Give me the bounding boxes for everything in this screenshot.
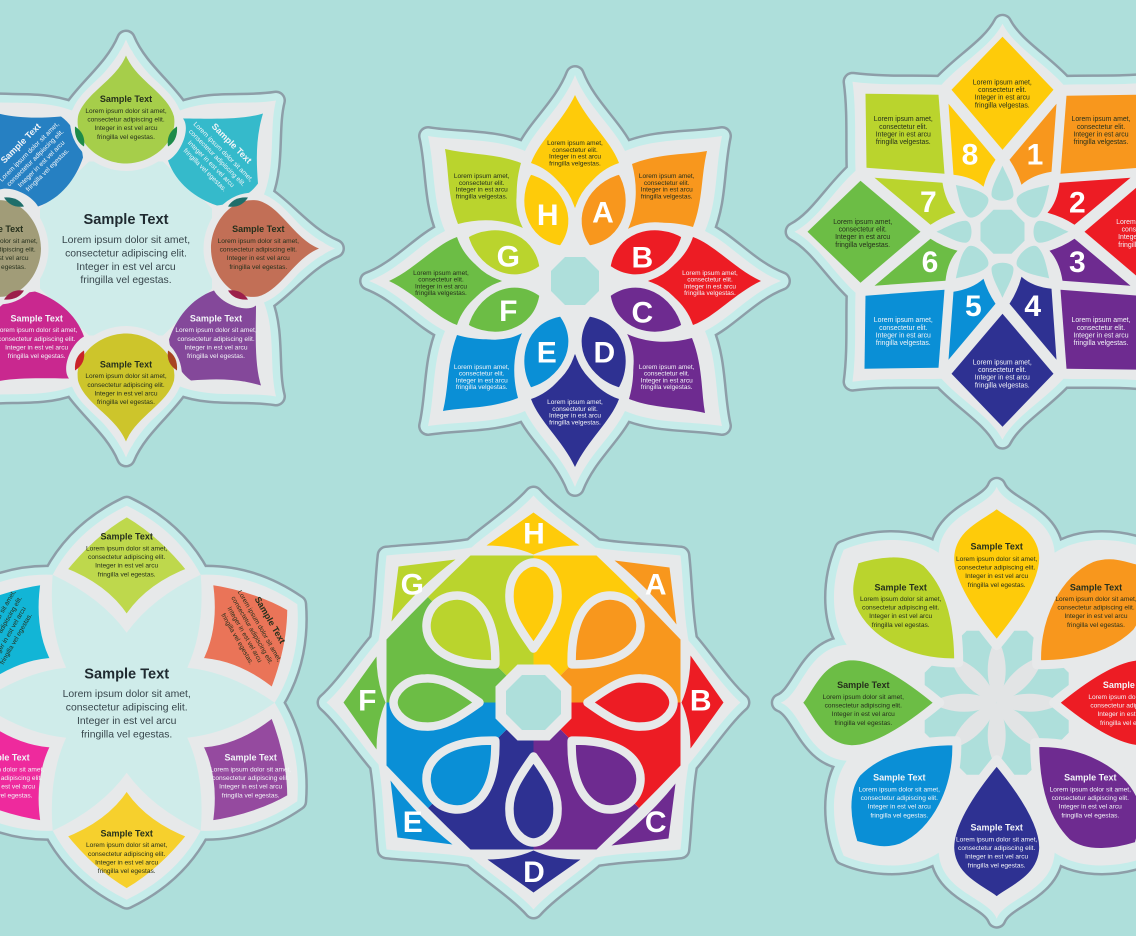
numbers 1 to 8	[920, 138, 1086, 323]
letters A to H: B	[690, 684, 712, 718]
text: navy diamond: Lorem ipsum amet,	[973, 360, 1032, 366]
text: bottom drop: Sample Text	[100, 359, 152, 369]
text: lime petal: fringilla vel egestas.	[98, 571, 156, 578]
text: coral petal rotated: consectetur adipiscing elit.	[229, 595, 274, 666]
letters A to H: E	[403, 806, 423, 839]
text: purple panel: Lorem ipsum amet,	[1072, 317, 1131, 324]
text: red petal: Integer in est arcu	[684, 283, 736, 290]
text: blue leaf: Integer in est vel arcu	[868, 804, 931, 811]
text: yellow petal: Integer in est vel arcu	[95, 859, 159, 866]
text: orange petal: fringilla velgestas.	[641, 193, 693, 200]
text: coral petal rotated	[213, 582, 295, 676]
text: magenta petal: consectetur adipiscing elit.	[0, 336, 76, 343]
text: lime petal: Integer in est vel arcu	[95, 563, 159, 570]
text: green leaf: Sample Text	[837, 680, 889, 690]
text: bottom drop: Lorem ipsum dolor sit amet,	[85, 373, 167, 380]
text: top drop: Lorem ipsum dolor sit amet,	[85, 108, 167, 115]
letters A to H: F	[358, 684, 376, 718]
text: right drop: fringilla vel egestas.	[229, 264, 287, 271]
text: green diamond: consectetur elit.	[839, 227, 887, 234]
text: navy leaf	[956, 823, 1038, 869]
numbers 1 to 8: 2	[1069, 187, 1086, 220]
text: teal petal rotated: Sample Text	[210, 121, 254, 165]
text: magenta petal	[0, 753, 44, 799]
text: lime petal: fringilla velgestas.	[456, 193, 508, 200]
text: teal petal rotated: Integer in est vel arcu	[186, 140, 236, 189]
text: navy leaf: Sample Text	[971, 823, 1023, 833]
text: lime panel: Lorem ipsum amet,	[874, 116, 933, 123]
panel: diagram three, numbered flower 1 to 8	[794, 24, 1136, 440]
numbers 1 to 8: 5	[965, 290, 982, 323]
text: green petal: Integer in est arcu	[415, 283, 467, 290]
text: orange panel: fringilla velgestas.	[1074, 139, 1128, 146]
letters A to H: G	[401, 568, 424, 602]
text: blue leaf	[859, 773, 940, 819]
text: purple petal: Sample Text	[225, 753, 277, 763]
central text one: Integer in est vel arcu	[76, 262, 176, 273]
text: purple petal: consectetur adipiscing elit.	[177, 336, 255, 343]
text: magenta petal: Integer in est vel arcu	[5, 344, 69, 351]
letters A to H: H	[523, 518, 545, 550]
text: orange petal: Integer in est arcu	[641, 187, 693, 194]
text: yellow diamond: consectetur elit.	[978, 87, 1027, 94]
panel: diagram two, lettered flower A to H	[369, 75, 781, 487]
text: purple petal: Integer in est vel arcu	[219, 784, 283, 791]
text: orange leaf: fringilla vel egestas.	[1067, 622, 1125, 629]
text: yellow diamond: Lorem ipsum amet,	[973, 80, 1032, 86]
text: yellow petal: fringilla velgestas.	[549, 160, 601, 167]
text: purple petal: fringilla velgestas.	[641, 384, 693, 391]
text: navy petal: consectetur elit.	[552, 406, 598, 413]
text: cyan petal rotated	[0, 582, 40, 676]
text: coral petal rotated: fringilla vel egestas.	[219, 612, 254, 666]
text: green petal: fringilla velgestas.	[415, 290, 467, 297]
text: purple petal: Integer in est arcu	[641, 377, 693, 384]
flower shapes six	[781, 487, 1136, 919]
text: blue panel: fringilla velgestas.	[876, 340, 931, 347]
text: coral petal rotated: Integer in est vel arcu	[225, 606, 263, 664]
text: green leaf: fringilla vel egestas.	[834, 720, 892, 727]
text: navy petal: Lorem ipsum amet,	[547, 399, 603, 406]
letters A to H: B	[631, 242, 653, 275]
text: yellow leaf	[956, 542, 1038, 589]
text: navy diamond: Integer in est arcu	[975, 375, 1030, 382]
text: purple panel: Integer in est arcu	[1073, 332, 1129, 339]
text: blue leaf: fringilla vel egestas.	[870, 812, 928, 819]
text: yellow petal: Sample Text	[101, 828, 153, 838]
letters A to H: E	[537, 337, 557, 370]
central text four: fringilla vel egestas.	[81, 730, 172, 740]
text: yellow petal: Lorem ipsum amet,	[547, 140, 603, 147]
text: cyan petal rotated: fringilla vel egestas.	[0, 612, 34, 666]
text: right drop	[218, 224, 299, 271]
text: purple petal	[175, 313, 257, 360]
text: green petal: consectetur elit.	[418, 277, 464, 284]
text: yellow leaf: consectetur adipiscing elit.	[958, 565, 1036, 572]
text: orange leaf: consectetur adipiscing elit.	[1057, 605, 1135, 612]
text: purple panel: fringilla velgestas.	[1074, 340, 1128, 347]
text: right drop: Lorem ipsum dolor sit amet,	[218, 238, 299, 245]
text: blue panel: Lorem ipsum amet,	[874, 317, 933, 324]
central text one: Sample Text	[84, 212, 169, 228]
text: purple leaf: fringilla vel egestas.	[1061, 812, 1119, 819]
text: purple petal	[210, 753, 292, 799]
text: blue leaf: consectetur adipiscing elit.	[861, 795, 938, 802]
text: orange panel: Lorem ipsum amet,	[1072, 116, 1131, 123]
central text one	[62, 212, 190, 286]
text: navy leaf: fringilla vel egestas.	[968, 862, 1026, 869]
text: purple leaf	[1050, 773, 1131, 819]
letters A to H: F	[499, 295, 517, 328]
text: blue petal: consectetur elit.	[459, 371, 505, 378]
central text four: Sample Text	[84, 666, 169, 682]
text: orange leaf: Integer in est vel arcu	[1064, 613, 1128, 620]
text: lime leaf: Sample Text	[875, 582, 927, 592]
numbers 1 to 8: 7	[920, 186, 937, 219]
text: yellow petal: fringilla vel egestas.	[98, 868, 156, 875]
text: navy diamond: consectetur elit.	[978, 367, 1027, 374]
central text one: fringilla vel egestas.	[80, 275, 172, 286]
letters A to H: D	[593, 337, 615, 370]
text: green diamond: Integer in est arcu	[835, 234, 890, 241]
text: green diamond: Lorem ipsum amet,	[833, 219, 892, 226]
text: orange leaf: Sample Text	[1070, 582, 1122, 592]
text: lime petal: Sample Text	[101, 532, 153, 542]
central text four: Lorem ipsum dolor sit amet,	[63, 689, 191, 700]
text: purple petal: Lorem ipsum dolor sit amet,	[175, 327, 257, 334]
text: yellow diamond: Integer in est arcu	[975, 95, 1030, 102]
text: yellow leaf: Integer in est vel arcu	[965, 573, 1029, 580]
text: navy petal: Integer in est arcu	[549, 413, 601, 420]
text: orange petal: consectetur elit.	[644, 180, 690, 187]
text: lime leaf: Lorem ipsum dolor sit amet,	[860, 596, 942, 603]
text: top drop: consectetur adipiscing elit.	[87, 117, 165, 124]
text: lime panel: consectetur elit.	[879, 124, 928, 131]
flower shapes four	[0, 506, 324, 900]
text: orange leaf	[1055, 582, 1136, 629]
text: lime leaf: fringilla vel egestas.	[872, 622, 930, 629]
text: navy leaf: consectetur adipiscing elit.	[958, 845, 1036, 852]
central text four: Integer in est vel arcu	[77, 716, 177, 727]
text: green leaf: Integer in est vel arcu	[832, 711, 895, 718]
text: purple petal: Sample Text	[190, 313, 242, 323]
text: bottom drop: Integer in est vel arcu	[94, 390, 158, 397]
text: lime petal: Lorem ipsum dolor sit amet,	[86, 546, 168, 552]
text: purple panel: consectetur elit.	[1077, 325, 1125, 332]
text: teal petal rotated: consectetur adipiscing elit.	[187, 128, 247, 188]
text: navy leaf: Lorem ipsum dolor sit amet,	[956, 836, 1038, 844]
text: purple petal: fringilla vel egestas.	[222, 792, 280, 799]
central text one: Lorem ipsum dolor sit amet,	[62, 235, 190, 246]
flower shapes three	[794, 24, 1136, 440]
letters A to H: A	[592, 197, 614, 230]
numbers 1 to 8: 8	[962, 138, 978, 171]
text: teal petal rotated: fringilla vel egestas.	[182, 147, 228, 193]
text: bottom drop	[85, 359, 167, 406]
text: purple petal: consectetur elit.	[644, 371, 690, 378]
text: magenta petal	[0, 313, 78, 360]
text: yellow petal: consectetur elit.	[552, 147, 598, 154]
letters A to H: A	[645, 568, 667, 602]
letters A to H	[497, 197, 653, 370]
panel: diagram five, interlaced rosette A to H	[307, 476, 760, 929]
letters A to H: H	[537, 199, 559, 232]
central text one: consectetur adipiscing elit.	[65, 248, 187, 259]
text: purple petal: fringilla vel egestas.	[187, 353, 245, 360]
numbers 1 to 8: 1	[1027, 138, 1043, 171]
numbers 1 to 8: 3	[1069, 246, 1086, 279]
text: lime petal: consectetur elit.	[459, 180, 505, 187]
text: purple petal: Lorem ipsum dolor sit amet,	[210, 766, 292, 774]
text: lime petal	[86, 532, 168, 578]
text: green leaf: consectetur adipiscing elit.	[825, 703, 902, 710]
text: coral petal rotated: Lorem ipsum dolor sit amet,	[236, 589, 283, 663]
text: green petal: Lorem ipsum amet,	[413, 270, 469, 277]
text: blue panel: consectetur elit.	[879, 325, 928, 332]
text: right drop: Sample Text	[232, 224, 284, 234]
text: lime petal: Lorem ipsum amet,	[454, 173, 510, 180]
text: bottom drop: consectetur adipiscing elit.	[87, 382, 165, 389]
text: purple leaf: Lorem ipsum dolor sit amet,	[1050, 786, 1131, 794]
text: green leaf: Lorem ipsum dolor sit amet,	[823, 694, 904, 701]
text: blue petal: Integer in est arcu	[456, 377, 508, 384]
text: yellow diamond: fringilla velgestas.	[975, 102, 1030, 109]
text: teal petal rotated	[173, 111, 264, 202]
text: lime panel: fringilla velgestas.	[876, 139, 931, 146]
text: yellow leaf: Lorem ipsum dolor sit amet,	[956, 556, 1038, 563]
text: orange leaf: Lorem ipsum dolor sit amet,	[1055, 596, 1136, 603]
text: magenta petal: fringilla vel egestas.	[8, 353, 66, 360]
text: coral petal rotated: Sample Text	[253, 595, 287, 645]
text: green leaf	[823, 680, 904, 727]
text: red petal: fringilla velgestas.	[684, 290, 736, 297]
text: red petal: consectetur elit.	[687, 277, 733, 284]
text: yellow petal: consectetur adipiscing elit.	[88, 851, 166, 858]
text: lime petal: Integer in est arcu	[456, 187, 508, 194]
text: lime petal: consectetur adipiscing elit.	[88, 554, 166, 561]
text: lime leaf: Integer in est vel arcu	[869, 613, 933, 620]
text: teal petal rotated: Lorem ipsum dolor sit amet,	[192, 121, 254, 183]
text: yellow leaf: Sample Text	[971, 542, 1023, 552]
text: yellow petal: Lorem ipsum dolor sit amet,	[86, 842, 168, 849]
text: navy diamond: fringilla velgestas.	[975, 382, 1030, 389]
text: orange panel: consectetur elit.	[1077, 124, 1125, 131]
letters A to H	[358, 518, 712, 889]
text: navy leaf: Integer in est vel arcu	[965, 854, 1029, 861]
text: purple petal: Integer in est vel arcu	[184, 344, 248, 351]
text: purple leaf: Integer in est vel arcu	[1059, 804, 1122, 811]
text: purple leaf: consectetur adipiscing elit.	[1052, 795, 1129, 802]
text: blue leaf: Sample Text	[873, 773, 925, 783]
text: top drop: Sample Text	[100, 94, 152, 104]
text: blue petal rotated: Integer in est vel arcu	[17, 139, 67, 189]
text: orange panel: Integer in est arcu	[1073, 131, 1129, 138]
text: lime panel: Integer in est arcu	[876, 131, 931, 138]
star frame one	[0, 40, 335, 458]
text: blue petal rotated	[0, 111, 79, 202]
numbers 1 to 8: 6	[922, 246, 938, 279]
panel: diagram six, eight leaf flower	[781, 487, 1136, 919]
text: purple petal: Lorem ipsum amet,	[639, 364, 695, 371]
text: green diamond: fringilla velgestas.	[835, 242, 890, 249]
letters A to H: G	[497, 241, 520, 274]
text: blue petal rotated: Lorem ipsum dolor sit amet,	[0, 121, 61, 183]
text: red petal: Lorem ipsum amet,	[682, 270, 738, 277]
numbers 1 to 8: 4	[1024, 290, 1041, 323]
text: right drop: Integer in est vel arcu	[227, 255, 290, 262]
text: red leaf	[1088, 680, 1136, 727]
letters A to H: C	[645, 806, 667, 839]
text: blue petal rotated: fringilla vel egestas.	[25, 147, 71, 193]
text: lime leaf	[860, 582, 942, 629]
text: top drop: Integer in est vel arcu	[94, 125, 158, 132]
text: purple petal: consectetur adipiscing elit.	[212, 775, 290, 782]
text: blue leaf: Lorem ipsum dolor sit amet,	[859, 786, 940, 794]
text: purple leaf: Sample Text	[1064, 773, 1116, 783]
text: blue petal: Lorem ipsum amet,	[454, 364, 510, 371]
central text four: consectetur adipiscing elit.	[66, 702, 188, 714]
text: orange petal: Lorem ipsum amet,	[639, 173, 695, 180]
text: blue panel: Integer in est arcu	[876, 332, 931, 339]
panel: diagram one, eight drops around central text	[0, 40, 335, 458]
text: magenta petal: Sample Text	[11, 313, 63, 323]
text: left drop	[0, 224, 38, 271]
flower shapes two	[369, 75, 781, 487]
text: blue petal: fringilla velgestas.	[456, 384, 508, 391]
text: navy petal: fringilla velgestas.	[549, 419, 601, 426]
text: top drop	[85, 94, 167, 141]
panel: diagram four, six petal flower	[0, 506, 324, 900]
text: yellow petal	[86, 828, 168, 875]
text: right drop: consectetur adipiscing elit.	[220, 247, 297, 254]
letters A to H: D	[523, 856, 545, 889]
text: lime leaf: consectetur adipiscing elit.	[862, 605, 940, 612]
text: bottom drop: fringilla vel egestas.	[97, 399, 155, 406]
rosette shapes	[307, 476, 760, 929]
text: yellow leaf: fringilla vel egestas.	[968, 582, 1026, 589]
text: yellow petal: Integer in est arcu	[549, 154, 601, 161]
letters A to H: C	[631, 297, 653, 330]
central text four	[63, 666, 191, 740]
text: top drop: fringilla vel egestas.	[97, 134, 155, 141]
text: blue petal rotated: consectetur adipiscing elit.	[6, 128, 66, 188]
